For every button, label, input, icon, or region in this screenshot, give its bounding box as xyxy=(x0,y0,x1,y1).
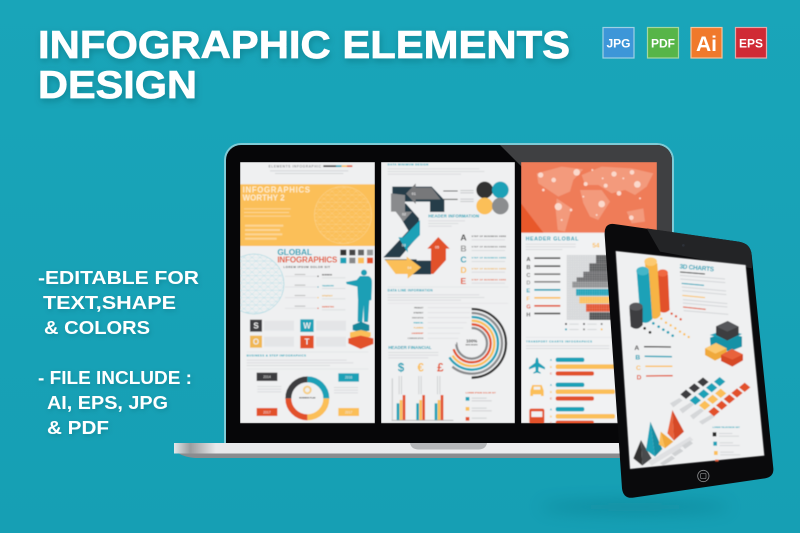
labelled rows: TEAMWORK xyxy=(322,284,334,287)
arrow cycle diagram xyxy=(383,183,450,279)
SWOT squares: T xyxy=(305,338,310,347)
3D cylinders xyxy=(629,257,690,338)
arrow cycle diagram: 03 xyxy=(402,244,406,248)
feature list: - FILE INCLUDE : xyxy=(38,368,192,388)
SWOT squares: W xyxy=(303,322,311,331)
A to D list: C xyxy=(636,365,641,372)
business step heading xyxy=(246,354,353,366)
list leading to rings: STRATEGY xyxy=(414,311,424,314)
currency bar chart xyxy=(392,361,453,420)
circle cluster xyxy=(443,182,509,214)
A to H list: D xyxy=(526,281,530,287)
A to E list xyxy=(460,232,507,286)
header global xyxy=(526,237,600,250)
A to D list: A xyxy=(634,345,639,352)
list leading to rings: PLANNING xyxy=(414,327,424,330)
year labels: 2017 xyxy=(263,410,271,414)
labelled rows: STRATEGY xyxy=(322,295,333,298)
page heading xyxy=(269,164,352,174)
feature list: & COLORS xyxy=(44,318,150,338)
header financial: HEADER FINANCIAL xyxy=(388,345,432,350)
transport bars: B xyxy=(550,365,552,369)
SWOT squares xyxy=(250,319,346,348)
A to H list: H xyxy=(526,312,530,318)
labelled rows: BUSINESS xyxy=(322,275,333,277)
teal cylinder xyxy=(636,267,652,323)
icon: Ai xyxy=(691,28,722,58)
home button xyxy=(698,470,709,482)
list leading to rings: COMMUNICATION xyxy=(408,337,424,340)
transport bars: A xyxy=(550,358,552,362)
labelled rows: MARKETING xyxy=(322,306,334,309)
A to E list: A xyxy=(460,232,467,242)
dark cylinder xyxy=(629,303,643,329)
A to E list: E xyxy=(460,276,466,286)
silhouette on pedestal xyxy=(346,270,373,349)
screen panel 3 xyxy=(521,162,657,425)
global infographics heading: LOREM IPSUM DOLOR SIT xyxy=(283,265,330,269)
transport bars: B xyxy=(550,414,552,418)
tablet legend: LOREM TELEVISION SET xyxy=(712,427,740,429)
A to E list: C xyxy=(460,254,467,264)
currency bar chart: $ xyxy=(398,361,405,374)
list leading to rings xyxy=(407,306,424,340)
laptop base xyxy=(174,443,640,458)
transport heading: TRANSPORT CHARTS INFOGRAPHICS xyxy=(526,339,592,343)
currency bar chart: € xyxy=(417,361,424,374)
data line heading xyxy=(387,288,484,300)
arrow cycle diagram: 02 xyxy=(402,212,406,216)
A to E list: D xyxy=(460,265,467,275)
3D charts text xyxy=(680,272,728,314)
A to E list: STEP OF BUSINESS HERE xyxy=(472,236,507,238)
year labels: 2016 xyxy=(345,376,353,380)
A to H list: B xyxy=(526,265,530,271)
global infographics heading: INFOGRAPHICS xyxy=(277,255,338,264)
data line heading: DATA LINE INFORMATION xyxy=(388,289,433,293)
icon: plane xyxy=(529,357,545,374)
transport bars: A xyxy=(550,407,552,411)
donut diagram: BUSINESS PLAN xyxy=(299,396,316,399)
feature list: & PDF xyxy=(47,418,109,438)
page heading: ELEMENTS INFOGRAPHIC xyxy=(269,164,322,168)
pyramid legend xyxy=(565,323,603,330)
red cylinder xyxy=(657,269,670,313)
currency bar chart: £ xyxy=(437,361,444,374)
3D charts heading: 3D CHARTS xyxy=(679,263,714,273)
ring chart: 100% xyxy=(466,338,477,343)
yellow header band: WORTHY 2 xyxy=(243,194,285,203)
A to E list: STEP OF BUSINESS HERE xyxy=(472,258,507,260)
A to H list: F xyxy=(526,297,530,303)
isometric pyramids xyxy=(633,410,693,466)
tablet screen xyxy=(616,251,764,469)
A to H list: A xyxy=(526,257,530,263)
tablet body xyxy=(605,224,773,498)
global infographics heading: GLOBAL xyxy=(277,247,312,257)
year labels: 2014 xyxy=(263,375,271,379)
icon: bus xyxy=(529,409,544,424)
ring chart: BENCHMARK xyxy=(466,344,478,347)
isometric dots xyxy=(643,312,690,338)
icon: Ai: Ai xyxy=(696,33,717,56)
red map header xyxy=(521,162,657,233)
header financial xyxy=(388,345,438,358)
list leading to rings: PRODUCT xyxy=(414,307,424,309)
A to H list xyxy=(526,257,560,318)
transport bars: C xyxy=(550,397,552,401)
ring chart xyxy=(437,309,506,378)
colour swatches xyxy=(340,250,373,263)
yellow cylinder xyxy=(644,257,661,319)
icon: JPG xyxy=(603,28,634,58)
transport bars: C xyxy=(550,421,552,425)
isometric hexagons xyxy=(705,321,743,367)
icon: EPS xyxy=(736,28,766,58)
yellow header band xyxy=(240,184,375,246)
A to D list xyxy=(634,345,673,382)
feature list: TEXT,SHAPE xyxy=(43,293,176,313)
year labels xyxy=(257,373,359,416)
arrow cycle diagram: 04 xyxy=(407,266,412,270)
header global: 54 xyxy=(592,242,600,249)
title xyxy=(38,24,570,107)
header global: HEADER GLOBAL xyxy=(526,237,579,243)
title: DESIGN xyxy=(38,64,197,107)
icon: JPG: JPG xyxy=(606,36,631,50)
isometric tile grid xyxy=(670,377,750,425)
A to H list: E xyxy=(526,289,530,295)
file format icons xyxy=(603,28,766,58)
icon: PDF: PDF xyxy=(651,36,675,50)
globe xyxy=(240,253,285,315)
business step heading: BUSINESS & STEP INFOGRAPHICS xyxy=(247,354,306,358)
header information xyxy=(428,213,479,227)
transport bars: A xyxy=(550,383,552,387)
screen panel 1 xyxy=(240,162,375,424)
laptop xyxy=(174,143,674,458)
pixel pyramid chart xyxy=(567,255,615,320)
list leading to rings: INNOVATION xyxy=(412,316,424,319)
donut diagram xyxy=(288,379,326,417)
global infographics heading xyxy=(277,247,338,269)
arrow cycle diagram: 05 xyxy=(435,245,439,249)
A to E list: STEP OF BUSINESS HERE xyxy=(472,279,507,281)
tablet xyxy=(605,224,773,498)
A to E list: STEP OF BUSINESS HERE xyxy=(472,268,507,270)
tablet shadow xyxy=(540,501,730,513)
A to H list: C xyxy=(526,273,530,279)
A to D list: B xyxy=(635,355,640,362)
year labels: 2017 xyxy=(345,410,353,414)
screen panel 2 xyxy=(381,162,515,423)
transport bars: B xyxy=(550,390,552,394)
transport heading xyxy=(526,340,609,349)
A to E list: B xyxy=(460,243,467,253)
A to E list: STEP OF BUSINESS HERE xyxy=(472,247,507,249)
feature list xyxy=(38,268,199,438)
tablet legend xyxy=(712,427,740,462)
yellow header band: INFOGRAPHICS xyxy=(243,186,310,195)
feature list: AI, EPS, JPG xyxy=(47,393,168,413)
chart legend: LOREM IPSUM DOLOR SIT xyxy=(466,392,496,394)
transport bars: C xyxy=(550,372,552,376)
panel heading: DATA MINIMUM DESIGN xyxy=(388,162,428,166)
A to D list: D xyxy=(637,375,642,382)
icon: car xyxy=(530,385,544,396)
icon: PDF xyxy=(648,28,678,58)
laptop lid xyxy=(224,143,674,444)
transport bars xyxy=(550,358,615,425)
list leading to rings: FINANCIAL xyxy=(413,321,424,324)
chart legend xyxy=(466,392,496,421)
SWOT squares: O xyxy=(253,338,259,347)
panel heading xyxy=(388,162,484,175)
title: INFOGRAPHIC ELEMENTS xyxy=(38,24,570,67)
A to H list: G xyxy=(526,305,531,311)
labelled rows xyxy=(294,274,345,310)
arrow cycle diagram: 01 xyxy=(412,192,416,196)
icon: EPS: EPS xyxy=(739,36,763,50)
header information: HEADER INFORMATION xyxy=(428,213,479,218)
list leading to rings: LEADERSHIP xyxy=(412,332,424,335)
feature list: -EDITABLE FOR xyxy=(38,268,199,288)
SWOT squares: S xyxy=(253,322,259,331)
